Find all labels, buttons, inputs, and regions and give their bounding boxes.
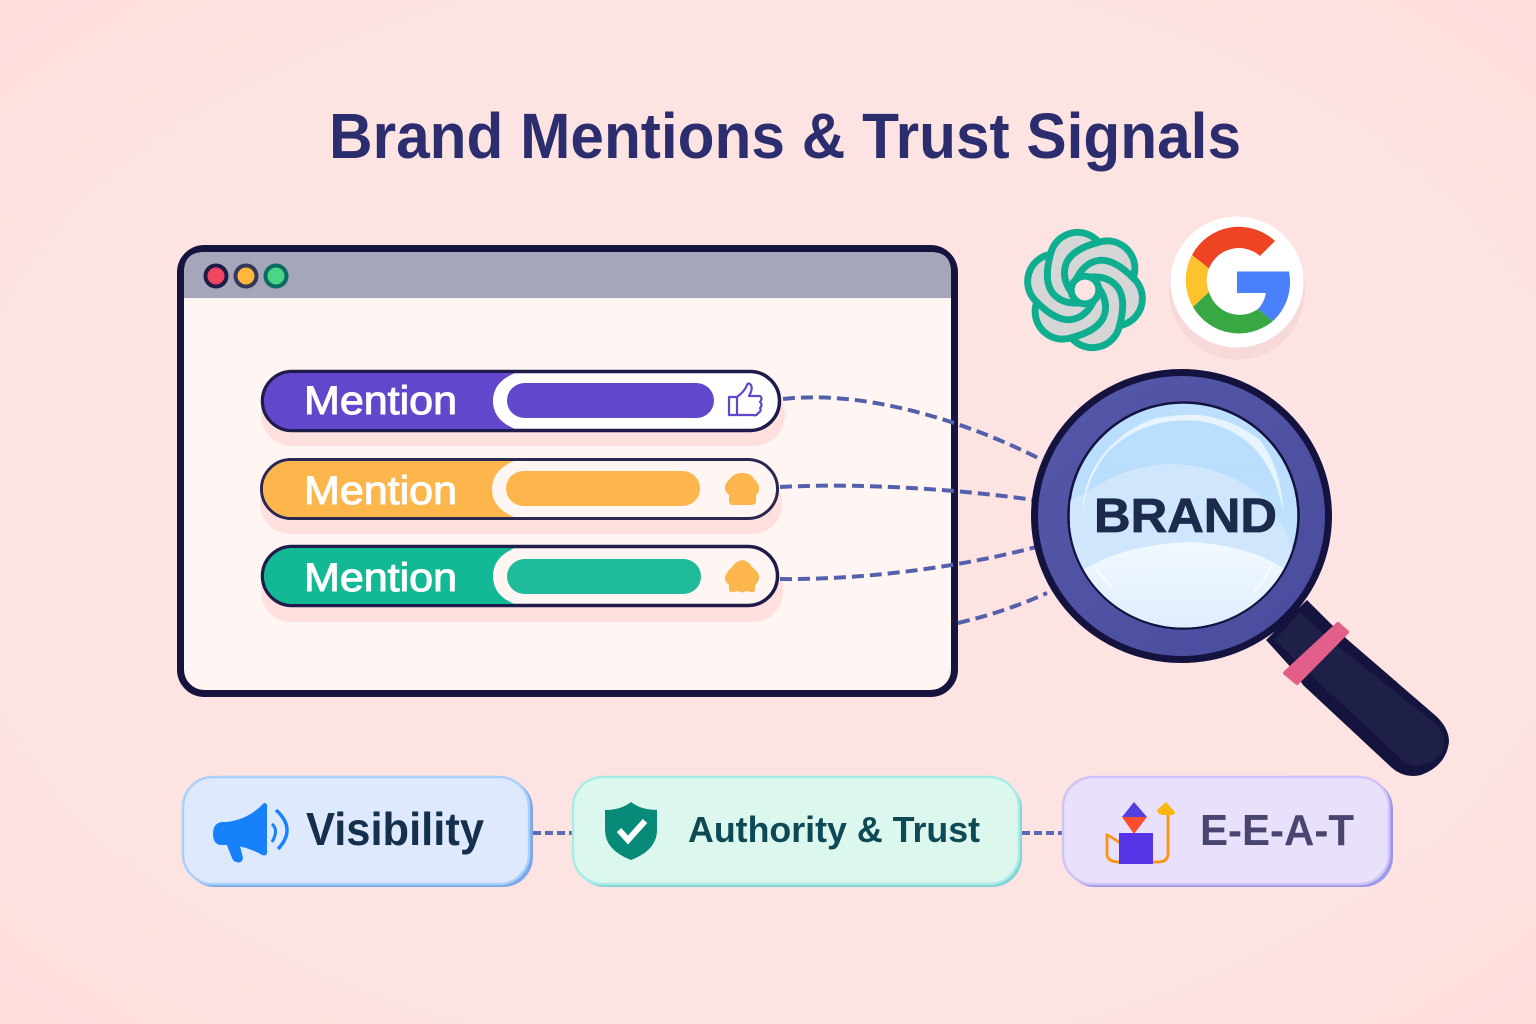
mention bar: purple xyxy=(261,372,785,446)
card: visibility xyxy=(183,777,533,887)
lens label: BRAND xyxy=(1094,490,1277,543)
magnifier rim xyxy=(1034,372,1328,660)
handle ring xyxy=(1285,624,1347,683)
label: Visibility: Visibility xyxy=(306,803,484,855)
mention bar: green: Mention xyxy=(304,556,457,600)
title: Brand Mentions & Trust Signals xyxy=(329,100,1241,172)
panel: browser window xyxy=(180,248,954,694)
mention bar: green xyxy=(261,546,783,622)
icon: stacked shapes with arrow xyxy=(1107,802,1175,864)
icon: megaphone xyxy=(213,803,287,862)
dashed connectors from mentions to magnifier xyxy=(780,397,1047,623)
icon: AI knot logo xyxy=(1028,232,1142,348)
mention bar: orange: Mention xyxy=(304,469,457,513)
window control dots xyxy=(206,266,286,286)
icon: thumbs up xyxy=(729,384,762,415)
mention bar: orange xyxy=(260,460,782,534)
label: E-E-A-T: E-E-A-T xyxy=(1200,806,1354,855)
icon: orange badge xyxy=(725,473,759,505)
card: E-E-A-T xyxy=(1063,777,1393,887)
magnifier lens xyxy=(1068,402,1298,628)
mention bar: purple: Mention xyxy=(304,379,457,423)
icon: magnifying glass xyxy=(1034,372,1449,776)
browser title bar xyxy=(184,252,951,298)
icon: Google logo xyxy=(1169,216,1305,360)
icon: shield with check xyxy=(605,802,657,860)
magnifier handle xyxy=(1266,600,1449,776)
lens reflections xyxy=(1070,415,1300,640)
label: Authority and Trust: Authority & Trust xyxy=(688,809,980,850)
icon: orange badge xyxy=(725,560,759,592)
dashed links between cards xyxy=(533,831,1062,835)
card: authority and trust xyxy=(573,777,1022,887)
